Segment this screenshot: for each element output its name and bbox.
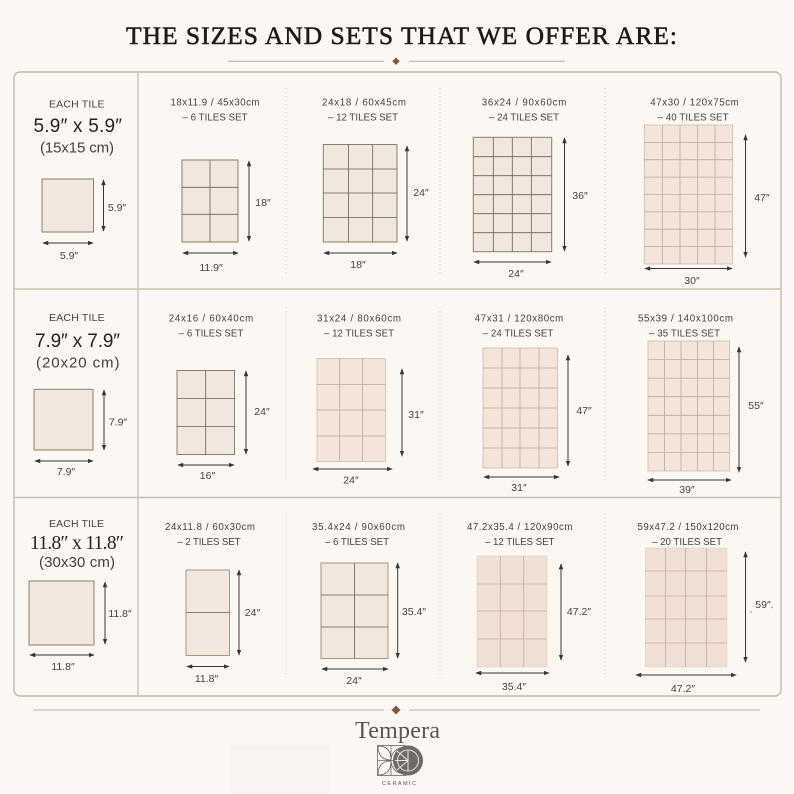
logo: Tempera Ceramic — [355, 718, 440, 787]
set: 36x24, 24 tiles: 36x24 / 90x60cm — [482, 98, 566, 108]
set: 31x24, 12 tiles: 24″ — [343, 474, 359, 486]
tile size heading — [34, 99, 122, 157]
tile diagram: 11.8″ — [51, 661, 75, 673]
set: 24x16, 6 tiles — [169, 314, 270, 482]
logo emblem — [378, 746, 423, 776]
set: 59x47.2, 20 tiles: 59x47.2 / 150x120cm — [638, 522, 738, 533]
set: 18x11.9, 6 tiles: – 6 TILES SET — [182, 113, 248, 124]
set: 18x11.9, 6 tiles — [170, 98, 271, 274]
set: 59x47.2, 20 tiles: – 20 TILES SET — [652, 537, 722, 548]
set: 24x16, 6 tiles: 24″ — [254, 406, 270, 418]
set: 47.2x35.4, 12 tiles — [467, 522, 591, 693]
tile size heading: EACH TILE — [49, 518, 104, 530]
tile diagram — [34, 389, 127, 478]
set: 24x16, 6 tiles: – 6 TILES SET — [179, 329, 243, 340]
set: 47x30, 40 tiles: 47″ — [754, 192, 770, 204]
set: 59x47.2, 20 tiles — [636, 522, 773, 695]
bottom divider with diamond — [33, 706, 760, 714]
tile diagram: 7.9″ — [57, 466, 75, 478]
set: 31x24, 12 tiles: 31″ — [408, 409, 424, 421]
set: 47.2x35.4, 12 tiles: 47.2x35.4 / 120x90cm — [467, 522, 572, 533]
set: 47x31, 24 tiles: – 24 TILES SET — [483, 329, 553, 340]
table frame — [14, 72, 781, 696]
set: 31x24, 12 tiles — [313, 314, 424, 486]
tile diagram — [29, 581, 132, 673]
set: 47x30, 40 tiles: 47x30 / 120x75cm — [650, 98, 739, 108]
set: 35.4x24, 6 tiles: 35.4″ — [402, 606, 426, 618]
tile diagram: 5.9″ — [108, 202, 126, 214]
set: 47.2x35.4, 12 tiles: – 12 TILES SET — [485, 537, 555, 548]
set: 24x11.8, 2 tiles: 24x11.8 / 60x30cm — [165, 522, 255, 533]
set: 24x18, 12 tiles: – 12 TILES SET — [328, 113, 398, 124]
set: 47.2x35.4, 12 tiles: 35.4″ — [502, 681, 526, 693]
set: 24x18, 12 tiles — [322, 98, 429, 271]
tile diagram: 11.8″ — [108, 608, 132, 620]
set: 18x11.9, 6 tiles: 11.9″ — [199, 262, 223, 274]
set: 35.4x24, 6 tiles — [312, 522, 426, 687]
set: 24x11.8, 2 tiles: 24″ — [245, 607, 260, 619]
row 3: 11.8 inch tile — [29, 518, 773, 695]
set: 24x11.8, 2 tiles — [165, 522, 260, 685]
set: 55x39, 35 tiles: – 35 TILES SET — [649, 329, 720, 340]
set: 47x30, 40 tiles — [644, 98, 770, 287]
set: 47x30, 40 tiles: – 40 TILES SET — [658, 113, 729, 124]
set: 36x24, 24 tiles: – 24 TILES SET — [489, 113, 559, 124]
set: 24x16, 6 tiles: 24x16 / 60x40cm — [169, 314, 253, 325]
set: 24x11.8, 2 tiles: 11.8″ — [195, 673, 218, 685]
tile diagram — [42, 179, 126, 262]
set: 35.4x24, 6 tiles: 35.4x24 / 90x60cm — [312, 522, 405, 533]
top divider with diamond — [228, 58, 565, 65]
set: 47x31, 24 tiles: 47x31 / 120x80cm — [475, 314, 563, 325]
tile size heading: 11.8″ x 11.8″ — [30, 533, 124, 554]
set: 35.4x24, 6 tiles: 24″ — [346, 675, 362, 687]
set: 24x18, 12 tiles: 24x18 / 60x45cm — [322, 98, 406, 108]
tile size heading: EACH TILE — [49, 312, 105, 324]
tile size heading: 5.9″ x 5.9″ — [34, 116, 122, 137]
set: 47x31, 24 tiles — [475, 314, 592, 494]
tile size heading — [30, 518, 124, 571]
tile size heading: EACH TILE — [49, 99, 104, 111]
set: 24x18, 12 tiles: 24″ — [413, 187, 429, 199]
set: 55x39, 35 tiles — [638, 314, 764, 496]
tile size heading: (15x15 cm) — [40, 140, 114, 157]
set: 55x39, 35 tiles: 55x39 / 140x100cm — [638, 314, 733, 325]
set: 18x11.9, 6 tiles: 18x11.9 / 45x30cm — [170, 98, 260, 108]
set: 59x47.2, 20 tiles: 59″ — [755, 599, 771, 611]
set: 47x30, 40 tiles: 30″ — [684, 275, 700, 287]
set: 31x24, 12 tiles: 31x24 / 80x60cm — [317, 314, 401, 325]
set: 36x24, 24 tiles — [473, 98, 588, 280]
set: 47.2x35.4, 12 tiles: 47.2″ — [567, 606, 591, 618]
set: 47x31, 24 tiles: 47″ — [576, 405, 592, 417]
set: 36x24, 24 tiles: 24″ — [508, 268, 524, 280]
set: 55x39, 35 tiles: 55″ — [748, 400, 764, 412]
ceramic caption: CERAMIC — [382, 781, 416, 787]
tile diagram: 7.9″ — [109, 416, 127, 428]
set: 18x11.9, 6 tiles: 18″ — [255, 197, 271, 209]
set: 31x24, 12 tiles: – 12 TILES SET — [324, 329, 394, 340]
row 1: 5.9 inch tile — [34, 98, 770, 287]
set: 24x18, 12 tiles: 18″ — [350, 259, 366, 271]
set: 55x39, 35 tiles: 39″ — [679, 484, 695, 496]
row 2: 7.9 inch tile — [34, 312, 764, 496]
title: THE SIZES AND SETS THAT WE OFFER ARE: — [126, 21, 677, 50]
set: 35.4x24, 6 tiles: – 6 TILES SET — [325, 537, 389, 548]
tile diagram: 5.9″ — [60, 250, 78, 262]
tile size heading: (20x20 cm) — [36, 355, 120, 372]
set: 24x16, 6 tiles: 16″ — [200, 470, 215, 482]
wordmark: Tempera — [355, 718, 440, 744]
set: 47x31, 24 tiles: 31″ — [511, 482, 527, 494]
set: 36x24, 24 tiles: 36″ — [572, 190, 588, 202]
set: 24x11.8, 2 tiles: – 2 TILES SET — [178, 537, 241, 548]
tile size heading: 7.9″ x 7.9″ — [35, 331, 120, 352]
tile size heading: (30x30 cm) — [39, 554, 115, 571]
set: 59x47.2, 20 tiles: 47.2″ — [671, 683, 695, 695]
tile size heading — [35, 312, 120, 372]
